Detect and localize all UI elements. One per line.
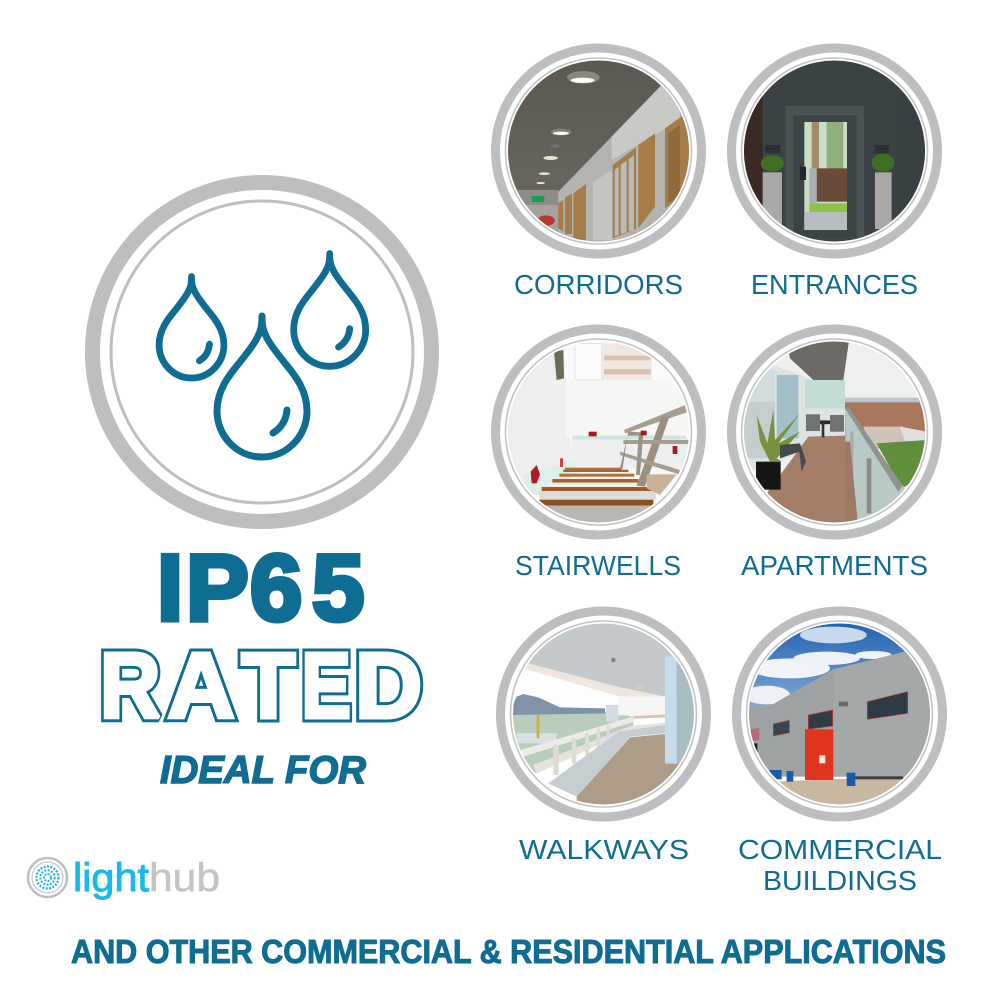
apartment rings	[732, 329, 938, 535]
logo wordmark: light	[73, 856, 149, 900]
label: commercial buildings	[738, 834, 942, 896]
logo wordmark: hub	[149, 856, 220, 900]
panel: corridors	[496, 48, 702, 300]
commercial building photo	[749, 624, 930, 804]
panel: walkways	[500, 611, 706, 865]
label: stairwells: STAIRWELLS	[515, 550, 681, 581]
heading: RATED outlined: E	[301, 634, 351, 737]
heading: IP65: IP65	[157, 535, 364, 640]
heading: RATED outlined: T	[241, 634, 295, 738]
entrance rings	[732, 48, 938, 254]
icon: centre drop	[217, 316, 307, 457]
heading: RATED outlined: A	[168, 634, 235, 738]
label: apartments: APARTMENTS	[741, 550, 928, 581]
heading: IDEAL FOR: IDEAL FOR	[160, 749, 366, 792]
heading: RATED outlined: D	[355, 634, 422, 738]
logo: lighthub	[28, 856, 220, 900]
heading: RATED outlined: A	[168, 634, 235, 738]
heading: RATED outlined: E	[301, 634, 351, 737]
commercial building rings	[736, 611, 942, 817]
corridor rings	[496, 48, 702, 254]
panel: stairwells	[496, 329, 702, 581]
label: walkways: WALKWAYS	[519, 834, 689, 865]
entrance photo	[744, 60, 925, 242]
panel: IP65 water drops badge	[92, 182, 432, 522]
apartment photo	[744, 342, 925, 522]
stairwell photo	[508, 343, 689, 522]
outer badge ring	[92, 182, 432, 522]
stairwell rings	[496, 329, 702, 535]
walkway photo	[513, 624, 694, 804]
icon: three water drops	[159, 254, 366, 457]
heading: RATED outlined	[100, 633, 422, 738]
panel: apartments	[732, 329, 938, 581]
panel: commercial buildings	[736, 611, 942, 896]
footer text: AND OTHER COMMERCIAL & RESIDENTIAL APPLICATIONS	[71, 933, 946, 970]
walkway rings	[500, 611, 706, 817]
heading: RATED outlined: R	[100, 633, 160, 737]
heading: RATED outlined: D	[355, 634, 422, 738]
label: commercial buildings: BUILDINGS	[763, 865, 917, 896]
icon: logo rings and dots	[28, 858, 67, 897]
corridor photo	[508, 60, 689, 242]
label: entrances: ENTRANCES	[751, 269, 918, 300]
icon: left drop	[159, 276, 224, 378]
panel: entrances	[732, 48, 938, 300]
icon: right drop	[294, 254, 366, 366]
label: corridors: CORRIDORS	[514, 269, 683, 300]
label: commercial buildings: COMMERCIAL	[738, 834, 942, 865]
heading: RATED outlined: T	[241, 634, 295, 738]
heading: RATED outlined: R	[100, 633, 160, 737]
inner badge ring	[111, 201, 413, 503]
